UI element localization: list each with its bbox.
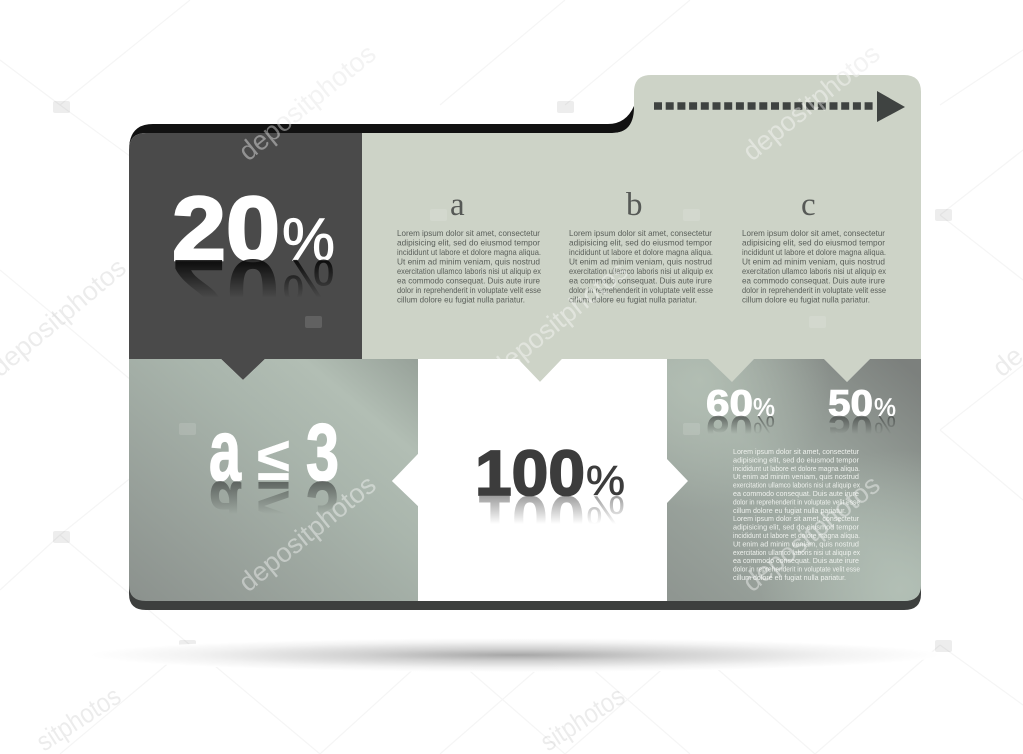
column a: a (450, 187, 465, 223)
watermark text over folder: depositphotos (485, 255, 634, 384)
white body text: adipisicing elit, sed do eiusmod tempor (733, 523, 859, 532)
column b: exercitation ullamco laboris nisi ut aliquip ex (569, 266, 714, 276)
column b: incididunt ut labore et dolore magna aliqua. (569, 247, 713, 257)
watermark text over folder (233, 38, 886, 598)
watermark text over folder: depositphotos (233, 38, 382, 167)
white body text (733, 447, 860, 582)
20 percent: 20 (172, 179, 280, 280)
formula reflection (209, 463, 339, 559)
white body text: ea commodo consequat. Duis aute irure (733, 556, 859, 565)
panel: two stats with text (667, 359, 921, 601)
white body text: dolor in reprehenderit in voluptate velit esse (733, 565, 860, 574)
white body text: exercitation ullamco laboris nisi ut aliquip ex (733, 548, 860, 557)
column a: incididunt ut labore et dolore magna aliqua. (397, 247, 541, 257)
camera marks on folder (179, 209, 826, 435)
column b: ea commodo consequat. Duis aute irure (569, 276, 712, 286)
folder top edge (129, 106, 634, 150)
stats reflection: % (874, 410, 896, 438)
white body text: adipisicing elit, sed do eiusmod tempor (733, 455, 859, 464)
column c: exercitation ullamco laboris nisi ut aliquip ex (742, 266, 887, 276)
stats reflection: 50 (828, 408, 873, 449)
20 percent: % (282, 206, 335, 273)
column c: Lorem ipsum dolor sit amet, consectetur (742, 228, 885, 238)
column c: ea commodo consequat. Duis aute irure (742, 276, 885, 286)
watermark text over folder: depositphotos (737, 38, 886, 167)
white body text: Lorem ipsum dolor sit amet, consectetur (733, 447, 859, 456)
white body text: cillum dolore eu fugiat nulla pariatur. (733, 506, 846, 515)
white body text: Ut enim ad minim veniam, quis nostrud (733, 539, 859, 548)
60 percent (706, 383, 775, 424)
50 percent (828, 383, 896, 424)
20 percent reflection: % (282, 247, 335, 314)
folder base edge (129, 585, 921, 610)
column c: dolor in reprehenderit in voluptate velit esse (742, 285, 886, 295)
stats reflection: % (753, 410, 775, 438)
panel: dark percentage (129, 133, 385, 380)
60 percent: 60 (706, 383, 753, 424)
white body text: incididunt ut labore et dolore magna aliqua. (733, 464, 860, 473)
column b: Ut enim ad minim veniam, quis nostrud (569, 256, 712, 266)
white body text: incididunt ut labore et dolore magna aliqua. (733, 531, 860, 540)
folder (129, 75, 921, 610)
formula reflection: 3 (306, 464, 339, 554)
100 percent reflection: 100 (475, 482, 585, 554)
column a: Lorem ipsum dolor sit amet, consectetur (397, 228, 540, 238)
panel: white 100 percent (392, 359, 688, 601)
camera marks on background (53, 101, 952, 652)
50 percent: 50 (828, 383, 873, 424)
white body text: Ut enim ad minim veniam, quis nostrud (733, 472, 859, 481)
column c: cillum dolore eu fugiat nulla pariatur. (742, 294, 870, 304)
formula reflection: a (209, 463, 242, 559)
column b: cillum dolore eu fugiat nulla pariatur. (569, 294, 697, 304)
column b: adipisicing elit, sed do eiusmod tempor (569, 238, 712, 248)
white body text: ea commodo consequat. Duis aute irure (733, 489, 859, 498)
column a: cillum dolore eu fugiat nulla pariatur. (397, 294, 525, 304)
stats reflection (706, 408, 896, 449)
column a: dolor in reprehenderit in voluptate velit esse (397, 285, 541, 295)
column a: adipisicing elit, sed do eiusmod tempor (397, 238, 540, 248)
stats reflection: 60 (706, 408, 753, 449)
column c: incididunt ut labore et dolore magna aliqua. (742, 247, 886, 257)
white body text: cillum dolore eu fugiat nulla pariatur. (733, 573, 846, 582)
column a: exercitation ullamco laboris nisi ut aliquip ex (397, 266, 542, 276)
column c: c (801, 187, 816, 223)
column c: adipisicing elit, sed do eiusmod tempor (742, 238, 885, 248)
20 percent (172, 179, 335, 280)
panel: formula (129, 359, 418, 601)
formula a less or equal 3: ≤ (257, 425, 290, 494)
white body text: exercitation ullamco laboris nisi ut aliquip ex (733, 481, 860, 490)
watermark text on background: depositphotos (737, 38, 886, 167)
60 percent: % (753, 394, 775, 422)
white body text: Lorem ipsum dolor sit amet, consectetur (733, 514, 859, 523)
100 percent: 100 (475, 437, 585, 509)
watermark text over folder: depositphotos (233, 469, 382, 598)
column c: Ut enim ad minim veniam, quis nostrud (742, 256, 885, 266)
100 percent reflection: % (586, 487, 625, 534)
50 percent: % (874, 394, 896, 422)
column a (397, 187, 542, 304)
20 percent reflection (172, 240, 335, 341)
column b: Lorem ipsum dolor sit amet, consectetur (569, 228, 712, 238)
formula a less or equal 3: a (209, 403, 242, 499)
panel: light text with tab (362, 75, 921, 382)
column b: b (626, 187, 642, 223)
column a: ea commodo consequat. Duis aute irure (397, 276, 540, 286)
watermark text over folder: depositphotos (737, 469, 886, 598)
column b (569, 187, 714, 304)
ground shadow (90, 638, 940, 672)
column a: Ut enim ad minim veniam, quis nostrud (397, 256, 540, 266)
formula reflection: ≤ (257, 468, 290, 537)
column c (742, 187, 887, 304)
100 percent: % (586, 457, 625, 504)
column b: dolor in reprehenderit in voluptate velit esse (569, 285, 713, 295)
formula a less or equal 3 (209, 403, 339, 499)
formula a less or equal 3: 3 (306, 408, 339, 498)
white body text: dolor in reprehenderit in voluptate velit esse (733, 497, 860, 506)
dashed arrow (654, 91, 905, 122)
20 percent reflection: 20 (172, 240, 280, 341)
watermark text on background: depositphotos (233, 38, 382, 167)
